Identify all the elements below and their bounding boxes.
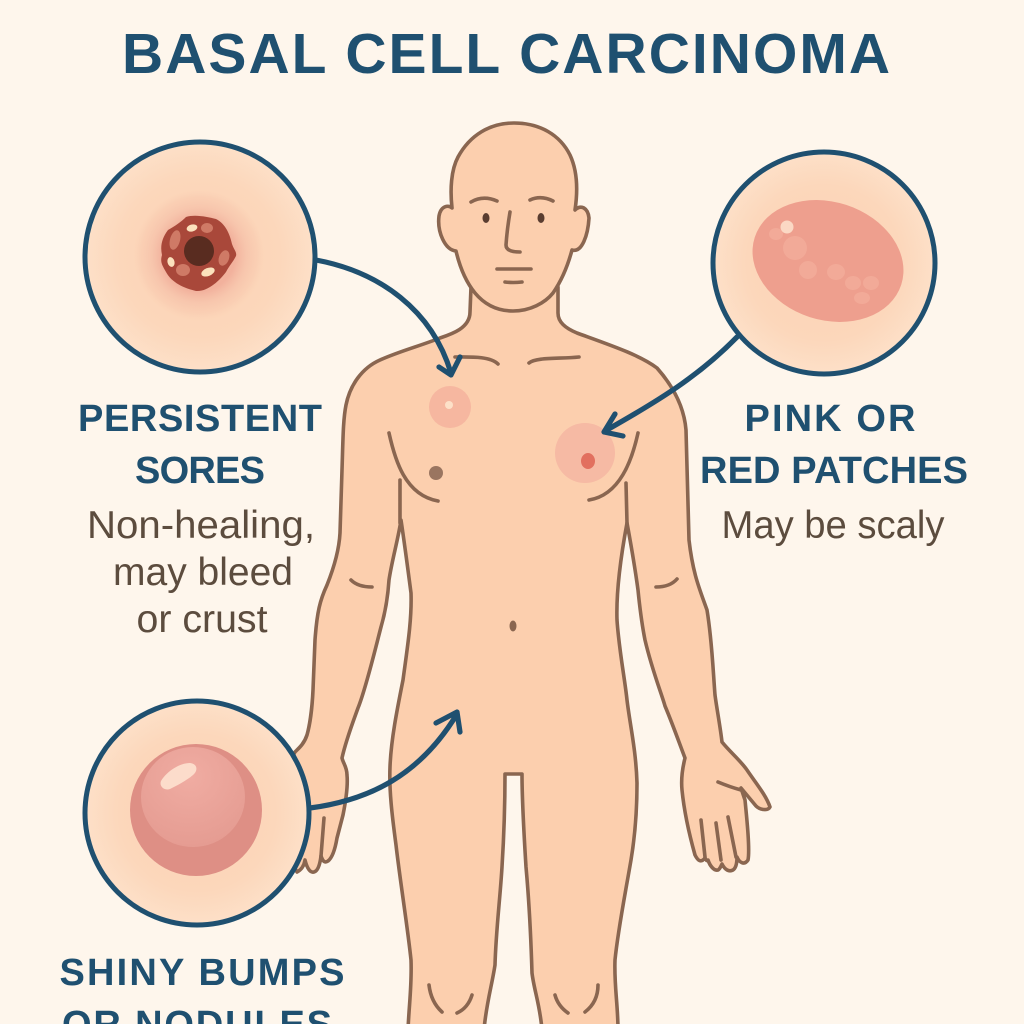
crust flecks bbox=[166, 223, 216, 278]
panel: pink or red patches circle bbox=[713, 152, 935, 374]
body outline bbox=[285, 287, 770, 1024]
label: pink or red patches: PINK OR bbox=[744, 398, 916, 440]
nodule bbox=[130, 744, 262, 876]
description: persistent sores: Non-healing, bbox=[87, 504, 315, 547]
label: shiny bumps or nodules bbox=[60, 952, 344, 1024]
skin spot upper bbox=[429, 386, 471, 428]
lesion centre bbox=[184, 236, 214, 266]
chest, arm and knee lines bbox=[321, 357, 741, 1013]
arrow: sores to chest bbox=[316, 260, 460, 375]
description: persistent sores: may bleed bbox=[113, 551, 293, 594]
nodule inner shine bbox=[141, 747, 245, 847]
panel: shiny bumps circle bbox=[85, 701, 309, 925]
lesion bbox=[161, 216, 236, 291]
label: persistent sores: PERSISTENT bbox=[78, 398, 322, 440]
face features bbox=[471, 198, 553, 282]
head bbox=[439, 123, 589, 311]
patch bbox=[737, 181, 919, 341]
label: persistent sores: SORES bbox=[135, 450, 265, 492]
highlight bbox=[161, 763, 196, 789]
panel: persistent sores circle bbox=[85, 142, 315, 372]
skin spot lower bbox=[555, 423, 615, 483]
lesion halo bbox=[133, 189, 265, 321]
description: persistent sores: or crust bbox=[136, 598, 268, 641]
patch lighter scales bbox=[769, 228, 879, 304]
label: persistent sores bbox=[78, 398, 322, 492]
description: persistent sores bbox=[87, 504, 315, 641]
nipple bbox=[429, 466, 443, 480]
description: pink or red patches: May be scaly bbox=[722, 504, 945, 547]
label: pink or red patches bbox=[700, 398, 968, 492]
label: pink or red patches: RED PATCHES bbox=[700, 450, 968, 492]
human body figure bbox=[285, 123, 770, 1024]
arrow: patches to chest bbox=[604, 337, 737, 436]
title: BASAL CELL CARCINOMA bbox=[122, 22, 890, 86]
navel bbox=[510, 620, 516, 632]
label: shiny bumps or nodules: SHINY BUMPS bbox=[60, 952, 344, 994]
lesion pale patches bbox=[168, 223, 231, 276]
highlight bbox=[780, 220, 794, 234]
arrow: bumps to abdomen bbox=[310, 712, 460, 808]
